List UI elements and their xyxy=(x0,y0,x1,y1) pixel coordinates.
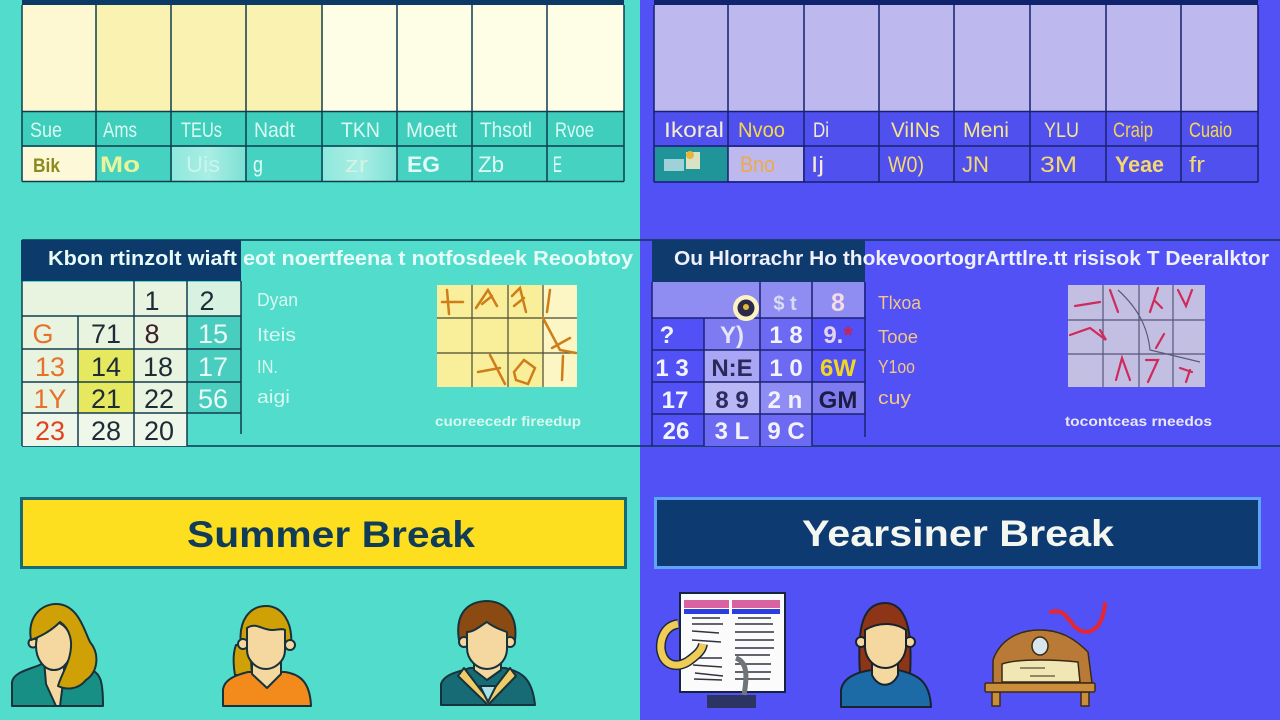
chart: right month calendar: 8 9 xyxy=(715,387,749,414)
icon: grey hook xyxy=(736,658,746,695)
chart: right month calendar: 1 3 xyxy=(655,355,689,382)
table values: Ij xyxy=(811,152,824,177)
legend: right labels: cuy xyxy=(878,388,911,408)
table values: E xyxy=(553,152,562,177)
table values: EG xyxy=(407,152,440,177)
legend: right labels: Tlxoa xyxy=(878,293,922,313)
legend: right labels: Y1oo xyxy=(878,357,915,377)
chart: right month calendar: 3 L xyxy=(715,418,749,445)
table headings xyxy=(30,119,594,142)
table headings: TKN xyxy=(341,119,380,142)
caption: left grid: cuoreecedr fireedup xyxy=(435,413,581,429)
chart: left month calendar: 14 xyxy=(91,352,121,382)
chart: left month calendar: 22 xyxy=(144,384,174,414)
icon: vintage wooden radio on a table xyxy=(985,604,1105,706)
chart: left sketch grid xyxy=(437,285,577,387)
banner: Summer Break: Summer Break xyxy=(187,514,475,555)
header band xyxy=(21,240,241,281)
table values: 3M xyxy=(1040,152,1077,177)
icon: person with curly brown hair xyxy=(441,601,535,705)
table values: fr xyxy=(1189,152,1205,177)
table headings: Thsotl xyxy=(480,119,532,142)
panel: left top table xyxy=(22,0,624,182)
icon: small folder and note xyxy=(664,151,700,171)
icon: woman with long golden hair xyxy=(12,604,103,706)
left middle heading: Kbon rtinzolt wiaft eot noertfeena t notfosdeek Reoobtoy xyxy=(48,248,634,270)
chart: left month calendar: 1Y xyxy=(33,384,67,414)
chart: left month calendar: 18 xyxy=(143,352,173,382)
chart: left month calendar: 17 xyxy=(198,352,228,382)
table headings: YLU xyxy=(1044,119,1079,142)
legend: right labels: Tooe xyxy=(878,327,918,347)
chart: right month calendar: GM xyxy=(819,387,857,414)
table values: Zb xyxy=(478,152,504,177)
table headings: Rvoe xyxy=(555,119,594,142)
table values: Uis xyxy=(186,152,220,177)
banner: Summer Break xyxy=(22,498,626,568)
chart: right month calendar: Y) xyxy=(720,322,744,349)
chart: left month calendar: 8 xyxy=(144,319,160,349)
chart: left month calendar: 20 xyxy=(144,416,174,446)
chart: left month calendar: 23 xyxy=(35,416,65,446)
chart: left month calendar: 13 xyxy=(35,352,65,382)
table headings: Ams xyxy=(103,119,137,142)
chart: left month calendar: G xyxy=(32,319,54,349)
table headings: Nadt xyxy=(254,119,295,142)
panel: right violet background xyxy=(640,0,1280,720)
table values: zr xyxy=(345,152,368,177)
table headings: Cuaio xyxy=(1189,119,1232,142)
panel: right top table xyxy=(654,0,1258,182)
panel: left middle frame xyxy=(21,240,1280,446)
table values: Bik xyxy=(33,156,60,177)
chart: left month calendar: 28 xyxy=(91,416,121,446)
table values: Yeae xyxy=(1115,152,1164,177)
icon: gold badge xyxy=(733,295,759,321)
red squiggle xyxy=(1051,604,1105,632)
legend: left labels: Iteis xyxy=(257,325,296,345)
table values: Bno xyxy=(740,152,775,177)
chart: right month calendar: $ t xyxy=(773,293,797,315)
panel: right middle heading: Ou Hlorrachr Ho thokevoortogrArttlre.tt risisok T Deeralktor xyxy=(674,248,1269,270)
chart: right month calendar: 26 xyxy=(663,418,689,445)
chart: right month calendar: 9 C xyxy=(767,418,805,445)
chart: right month calendar: N:E xyxy=(711,355,753,382)
chart: right month calendar: 17 xyxy=(662,387,688,414)
chart: right month calendar: 9.* xyxy=(823,322,853,349)
chart: left month calendar: 15 xyxy=(198,319,228,349)
legend: left labels: IN. xyxy=(257,357,278,377)
chart: right month calendar: ? xyxy=(660,322,674,349)
table headings: Meni xyxy=(963,119,1009,142)
legend: left labels xyxy=(257,290,298,407)
table headings: Ikoral xyxy=(664,119,724,142)
table values: W0) xyxy=(888,152,924,177)
panel: right middle heading xyxy=(652,240,1269,282)
table headings: Nvoo xyxy=(738,119,785,142)
chart: right sketch grid xyxy=(1068,285,1205,387)
chart: right month calendar: 2 n xyxy=(768,387,802,414)
table values: JN xyxy=(962,152,989,177)
chart: left month calendar: 1 xyxy=(144,286,160,316)
chart: right month calendar: 1 0 xyxy=(769,355,803,382)
chart: left month calendar: 71 xyxy=(91,319,121,349)
chart: left month calendar: 56 xyxy=(198,384,228,414)
table headings: TEUs xyxy=(181,119,222,142)
table values: Mo xyxy=(100,152,140,177)
caption: right grid: tocontceas rneedos xyxy=(1065,413,1212,429)
table headings xyxy=(664,119,1232,142)
table headings: Moett xyxy=(406,119,457,142)
legend: left labels: Dyan xyxy=(257,290,298,310)
arrow: yellow curved xyxy=(661,624,703,665)
table headings: Sue xyxy=(30,119,62,142)
chart: right month calendar xyxy=(652,282,865,446)
legend: left labels: aigi xyxy=(257,387,290,407)
banner: Yearsiner Break xyxy=(656,498,1260,568)
table headings: Di xyxy=(813,119,829,142)
table values: g xyxy=(253,152,263,177)
icon: document on monitor stand with arrow xyxy=(661,593,785,708)
banner: Yearsiner Break: Yearsiner Break xyxy=(802,513,1114,554)
chart: right month calendar: 8 xyxy=(831,289,845,317)
table values xyxy=(740,152,1205,177)
chart: right month calendar: 6W xyxy=(820,355,856,382)
table headings: ViINs xyxy=(891,119,940,142)
chart: left month calendar: 2 xyxy=(199,286,215,316)
chart: left month calendar xyxy=(22,281,241,446)
icon: person with ponytail and orange top xyxy=(223,606,311,706)
chart: left month calendar: 21 xyxy=(91,384,121,414)
legend: right labels xyxy=(878,293,922,408)
table headings: Craip xyxy=(1113,119,1153,142)
panel: left teal background xyxy=(0,0,640,720)
icon: person with auburn hair and blue top xyxy=(841,603,931,707)
table values xyxy=(33,152,562,177)
chart: right month calendar: 1 8 xyxy=(769,322,803,349)
